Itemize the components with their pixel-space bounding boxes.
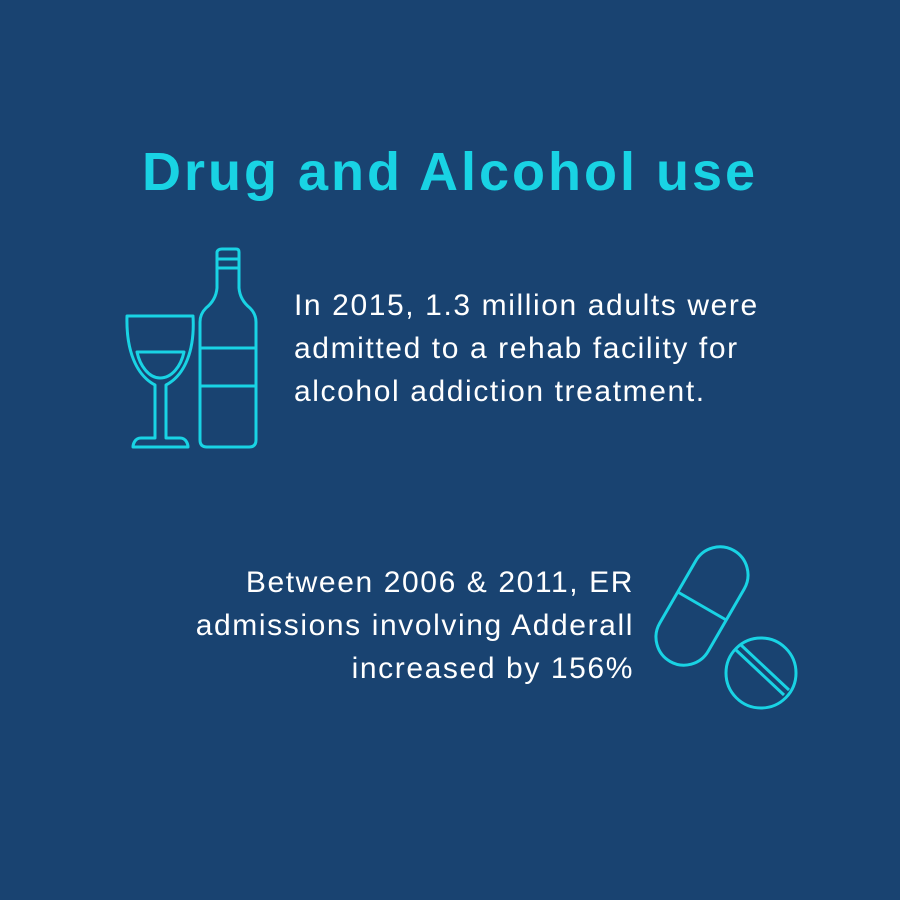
text block: alcohol stat: alcohol addiction treatment. xyxy=(294,375,706,408)
text block: adderall stat: Between 2006 & 2011, ER xyxy=(246,566,634,599)
title: Drug and Alcohol use xyxy=(142,142,758,202)
text block: adderall stat xyxy=(196,566,634,685)
text block: adderall stat: increased by 156% xyxy=(352,652,634,685)
text block: adderall stat: admissions involving Adderall xyxy=(196,609,634,642)
text block: alcohol stat: admitted to a rehab facility for xyxy=(294,332,739,365)
text block: alcohol stat xyxy=(294,289,759,408)
text block: alcohol stat: In 2015, 1.3 million adults were xyxy=(294,289,759,322)
